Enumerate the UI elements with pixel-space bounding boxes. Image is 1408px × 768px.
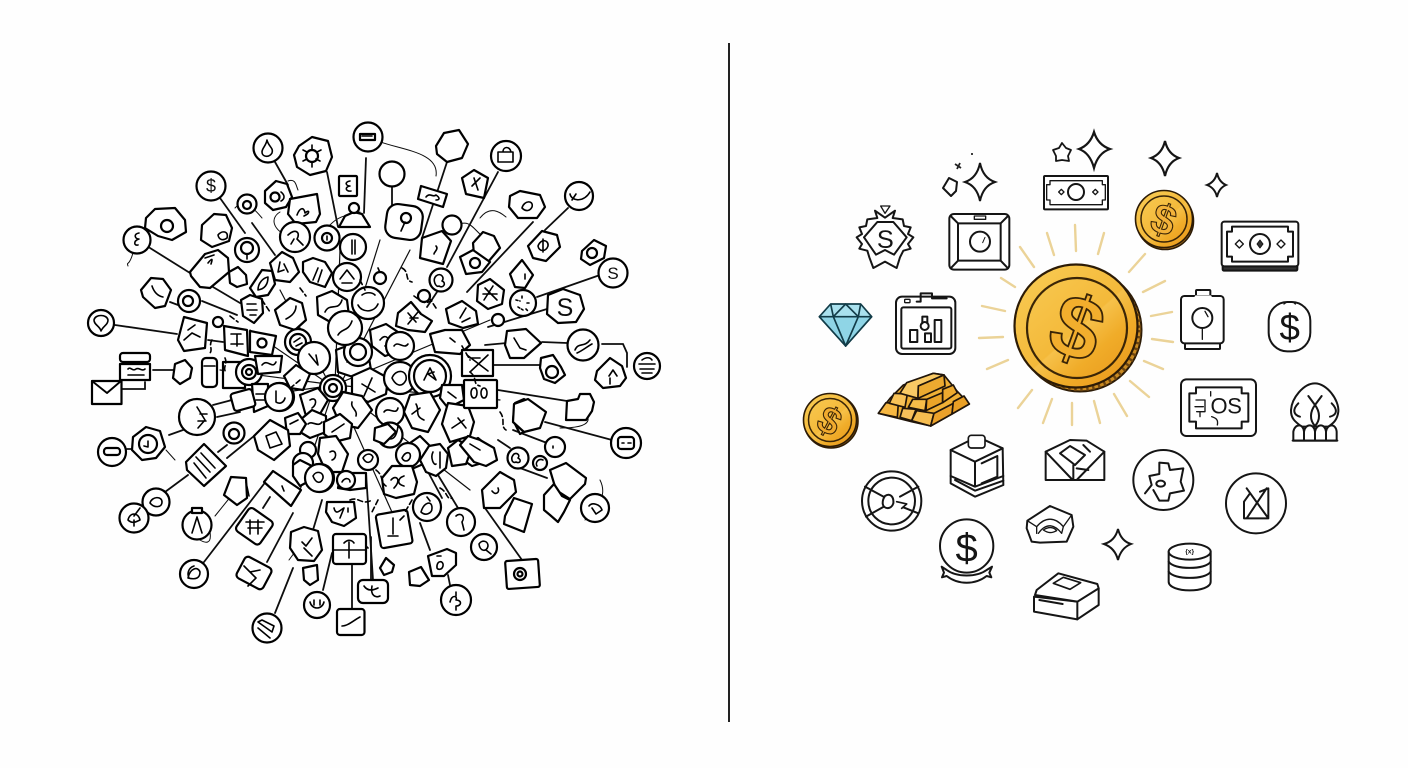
icon: dollar circle with ribbon: $	[956, 527, 978, 571]
icon: sparkle left	[965, 163, 995, 201]
icon: shell node	[201, 214, 232, 247]
icon: blot circle	[1133, 450, 1193, 510]
icon: ring node	[124, 226, 150, 254]
icon: tool diamond node	[235, 555, 273, 591]
icon: pill node	[98, 438, 126, 466]
icon: paw node	[142, 488, 170, 516]
icon: shield tag node	[326, 502, 356, 526]
icon: gold coin top: $	[1145, 193, 1183, 246]
icon: peg node	[340, 234, 366, 260]
icon: dollar node	[196, 172, 226, 200]
icon: coin stack	[1169, 544, 1211, 590]
icon: S badge: S	[877, 226, 894, 254]
icon: lined diamond node	[186, 444, 226, 486]
icon: petal node	[270, 252, 299, 282]
icon: tag node	[141, 278, 171, 308]
icon: sparkle bottom	[1104, 529, 1131, 560]
icon: fold node	[504, 498, 532, 532]
icon: ear node	[540, 355, 565, 383]
icon: blob small pair	[293, 460, 333, 492]
icon: boat node	[565, 182, 593, 210]
icon: cup node	[303, 565, 318, 585]
icon: money bag	[1269, 302, 1310, 351]
icon: house node	[460, 232, 500, 274]
icon: chart tablet	[896, 293, 955, 354]
icon: crumpled box node	[178, 317, 207, 351]
icon: cloud node	[275, 298, 306, 330]
icon: star top	[1053, 143, 1071, 161]
icon: sparkle small right	[1207, 173, 1226, 197]
icon: OS ticket: OS	[1210, 393, 1242, 418]
icon: large shell node	[190, 250, 229, 288]
icon: coin node	[178, 290, 200, 312]
icon: keyhole node	[384, 203, 424, 241]
icon: grid node	[477, 279, 504, 309]
icon: trash can node	[120, 353, 150, 380]
icon: case node	[333, 534, 366, 564]
connector spokes	[115, 138, 627, 613]
icon: diamond sheet node	[550, 463, 586, 499]
icon: target node	[314, 226, 340, 250]
icon: gold coin left	[804, 394, 858, 448]
icon: ornate disc	[285, 329, 311, 355]
icon: gold coin left: $	[810, 398, 848, 445]
icon: horse node	[581, 494, 609, 522]
icon: dollar circle with ribbon	[940, 519, 993, 583]
icon: crumple node	[446, 301, 478, 328]
icon: sparkle top center	[1079, 132, 1110, 168]
icon: virus node	[294, 137, 332, 175]
icon: hex line node	[505, 329, 541, 358]
icon: jagged blob node	[544, 484, 570, 522]
icon: cloud tail node	[595, 358, 626, 388]
icon: spiral node	[238, 194, 256, 214]
divider line	[728, 43, 730, 722]
icon: S badge	[857, 206, 913, 268]
icon: upper right tail nodes	[380, 130, 521, 186]
icon: envelope box	[1046, 440, 1104, 480]
icon: swirl node	[317, 291, 349, 323]
icon: folder node	[288, 194, 320, 224]
icon: eye node	[265, 181, 292, 210]
icon: pouch node	[280, 222, 310, 252]
icon: compass node	[182, 508, 212, 540]
icon: page node	[224, 326, 248, 356]
icon: G mark node	[533, 456, 547, 470]
icon: tail blobs south	[380, 558, 429, 586]
icon: crumple lines node	[513, 399, 546, 432]
icon: chip node	[611, 428, 641, 458]
sun rays	[979, 225, 1173, 425]
icon: bird node	[290, 527, 322, 561]
icon: puzzle node	[566, 394, 594, 420]
icon: tree node	[420, 216, 462, 264]
icon: money bag: $	[1279, 307, 1300, 348]
icon: spiral square	[236, 359, 262, 385]
icon: wedge node	[510, 260, 533, 288]
icon: gold coin top	[1136, 190, 1194, 250]
icon: side blobs	[173, 358, 245, 388]
icon: bottle jar	[1181, 290, 1224, 349]
icon: smile node	[352, 287, 384, 319]
icon: OS ticket	[1181, 379, 1256, 436]
icon: globe node	[528, 231, 560, 261]
icon: fish node	[396, 302, 432, 332]
icon: small money slip	[418, 186, 447, 207]
panel: focused value icons	[804, 132, 1338, 619]
icon: lower left tail nodes	[179, 383, 293, 435]
icon: wrench node	[568, 330, 598, 360]
icon: leaf node	[250, 270, 275, 297]
icon: coin stack: {x}	[1185, 548, 1195, 555]
icon: large gold coin: $	[1037, 273, 1117, 382]
icon: safe box	[949, 214, 1009, 270]
icon: note node	[339, 176, 357, 196]
icon: bill top	[1044, 176, 1108, 209]
icon: bill stack	[1222, 222, 1298, 271]
icon: tent node	[333, 263, 361, 291]
icon: coil node	[180, 560, 208, 588]
icon: house diamond node	[235, 507, 274, 546]
icon: crumpled card	[462, 170, 488, 198]
icon: cheese node	[428, 549, 456, 576]
icon: hand node	[303, 258, 332, 287]
icon: plain dot node	[545, 437, 565, 457]
icon: small blob	[229, 267, 247, 287]
icon: crumpled sheet	[224, 477, 249, 505]
icon: bell node	[339, 203, 370, 227]
icon: dollar node: $	[206, 176, 216, 196]
icon: blob node	[145, 208, 186, 240]
icon: tiny cross	[955, 154, 973, 169]
icon: flap pouch node	[460, 436, 497, 466]
icon: diamond	[819, 304, 872, 346]
icon: blank card node	[264, 471, 301, 506]
icon: clover coin node	[508, 448, 528, 468]
icon: leaf tag node	[581, 240, 606, 265]
icon: x poster node	[462, 350, 493, 376]
icon: drop node	[254, 134, 282, 162]
icon: pencil node	[252, 614, 282, 642]
icon: square target node	[505, 559, 540, 589]
icon: dotted node	[510, 290, 536, 316]
icon: crossed sack circle	[1226, 473, 1286, 533]
icon: tray node	[634, 353, 660, 379]
icon: grid coin	[224, 422, 244, 444]
panel: chaotic cluster of icons	[88, 122, 660, 642]
icon: large S node	[547, 289, 584, 323]
icon: lens node	[235, 238, 259, 262]
icon: closed box	[1034, 573, 1099, 619]
icon: bubble node	[471, 534, 497, 560]
icon: plant node	[120, 504, 148, 532]
icon: tulip node	[304, 592, 330, 618]
icon: clock node	[132, 427, 165, 460]
icon: lock node	[482, 472, 516, 508]
icon: shield node	[241, 295, 263, 323]
icon: ticket node	[354, 122, 382, 152]
icon: spade node	[441, 585, 471, 615]
icon: folder corner node	[430, 330, 470, 354]
icon: check square node	[337, 609, 364, 635]
icon: envelope	[92, 381, 122, 404]
icon: S badge node	[598, 258, 628, 288]
icon: cube with knob	[951, 435, 1003, 497]
icon: crystal	[1027, 506, 1073, 543]
icon: clover node	[430, 268, 452, 292]
icon: S badge node: S	[607, 264, 619, 283]
icon: X tile node	[358, 580, 388, 603]
icon: sparkle right	[1151, 141, 1179, 176]
icon: pin node	[88, 310, 114, 336]
icon: wide cushion	[509, 191, 545, 218]
icon: small star left	[943, 178, 957, 196]
icon: large S node: S	[557, 294, 573, 322]
icon: gold bars	[878, 373, 969, 426]
icon: large gold coin	[1014, 264, 1142, 392]
icon: stamp node	[250, 331, 276, 355]
icon: elephant plant	[1291, 383, 1338, 441]
dense inner cluster of overlapping icons	[209, 268, 540, 549]
icon: crossed wheel	[862, 471, 921, 531]
